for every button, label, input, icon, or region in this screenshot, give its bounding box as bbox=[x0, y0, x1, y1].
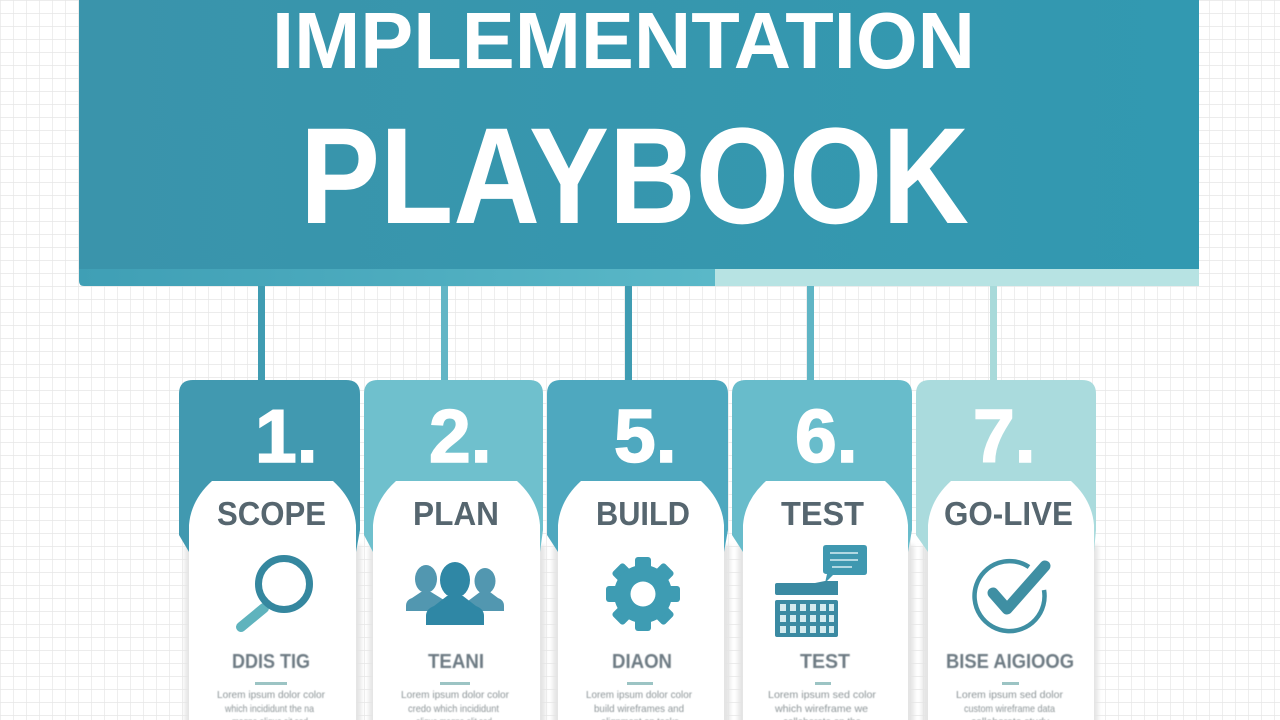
rule bbox=[815, 682, 831, 685]
icon: magnifying glass bbox=[241, 558, 310, 627]
left person bbox=[406, 565, 444, 611]
body text: which incididunt the na bbox=[224, 703, 314, 715]
body text: Lorem ipsum dolor color bbox=[401, 689, 509, 701]
number: 5. bbox=[614, 394, 677, 478]
subheading: DDIS TIG bbox=[232, 651, 310, 673]
body text: Lorem ipsum dolor color bbox=[217, 689, 325, 701]
body text: which wireframe we bbox=[774, 703, 868, 715]
subheading: TEANI bbox=[428, 651, 484, 673]
banner background bbox=[79, 0, 1199, 269]
card body bbox=[373, 481, 540, 720]
number tab bbox=[732, 380, 912, 552]
number: 1. bbox=[255, 394, 318, 478]
icon: check mark bbox=[975, 561, 1045, 631]
header banner bbox=[79, 0, 1199, 286]
title line 2: PLAYBOOK bbox=[300, 100, 969, 253]
card body bbox=[189, 481, 356, 720]
number: 6. bbox=[795, 394, 858, 478]
rule bbox=[1002, 682, 1019, 685]
body text bbox=[956, 689, 1063, 720]
number: 7. bbox=[973, 394, 1036, 478]
body text: credo which incididunt bbox=[408, 703, 499, 715]
connector lines bbox=[258, 284, 997, 382]
subheading: TEST bbox=[800, 651, 850, 673]
body text: Lorem ipsum sed dolor bbox=[956, 689, 1063, 701]
center person bbox=[426, 562, 484, 625]
card shadow bbox=[922, 545, 1098, 720]
step heading: TEST bbox=[781, 495, 864, 532]
body text: custom wireframe data bbox=[964, 703, 1055, 715]
card body bbox=[743, 481, 908, 720]
rule bbox=[255, 682, 287, 685]
number: 2. bbox=[429, 394, 492, 478]
body text bbox=[217, 689, 325, 720]
card shadow bbox=[738, 545, 914, 720]
card shadow bbox=[369, 545, 545, 720]
banner accent strip bbox=[79, 265, 1199, 286]
step heading: BUILD bbox=[596, 495, 690, 532]
subheading: BISE AIGIOOG bbox=[946, 651, 1074, 673]
panel: step 5 go-live bbox=[916, 380, 1098, 720]
body text bbox=[401, 689, 509, 720]
card shadow bbox=[185, 545, 361, 720]
body text bbox=[768, 689, 877, 720]
chat bubble bbox=[823, 545, 867, 583]
card body bbox=[928, 481, 1094, 720]
body text bbox=[586, 689, 692, 720]
icon: gear bbox=[606, 557, 680, 631]
subheading: DIAON bbox=[612, 651, 672, 673]
calendar bbox=[775, 581, 838, 637]
step heading: SCOPE bbox=[217, 495, 326, 532]
number tab bbox=[916, 380, 1096, 552]
icon: calendar and chat bubble bbox=[775, 545, 867, 637]
body text: Lorem ipsum dolor color bbox=[586, 689, 692, 701]
body text: build wireframes and bbox=[594, 703, 684, 715]
icon: team bbox=[406, 562, 504, 625]
step heading: GO-LIVE bbox=[944, 495, 1073, 532]
right person bbox=[468, 568, 504, 611]
panel: step 4 test bbox=[732, 380, 914, 720]
step heading: PLAN bbox=[413, 495, 499, 532]
panel: step 2 plan bbox=[364, 380, 545, 720]
rule bbox=[627, 682, 653, 685]
body text: Lorem ipsum sed color bbox=[768, 689, 877, 701]
rule bbox=[440, 682, 470, 685]
number tab bbox=[364, 380, 543, 552]
card body bbox=[558, 481, 724, 720]
number tab bbox=[547, 380, 728, 552]
panel: step 3 build bbox=[547, 380, 730, 720]
panel: step 1 scope bbox=[179, 380, 361, 720]
number tab bbox=[179, 380, 360, 552]
card shadow bbox=[553, 545, 730, 720]
